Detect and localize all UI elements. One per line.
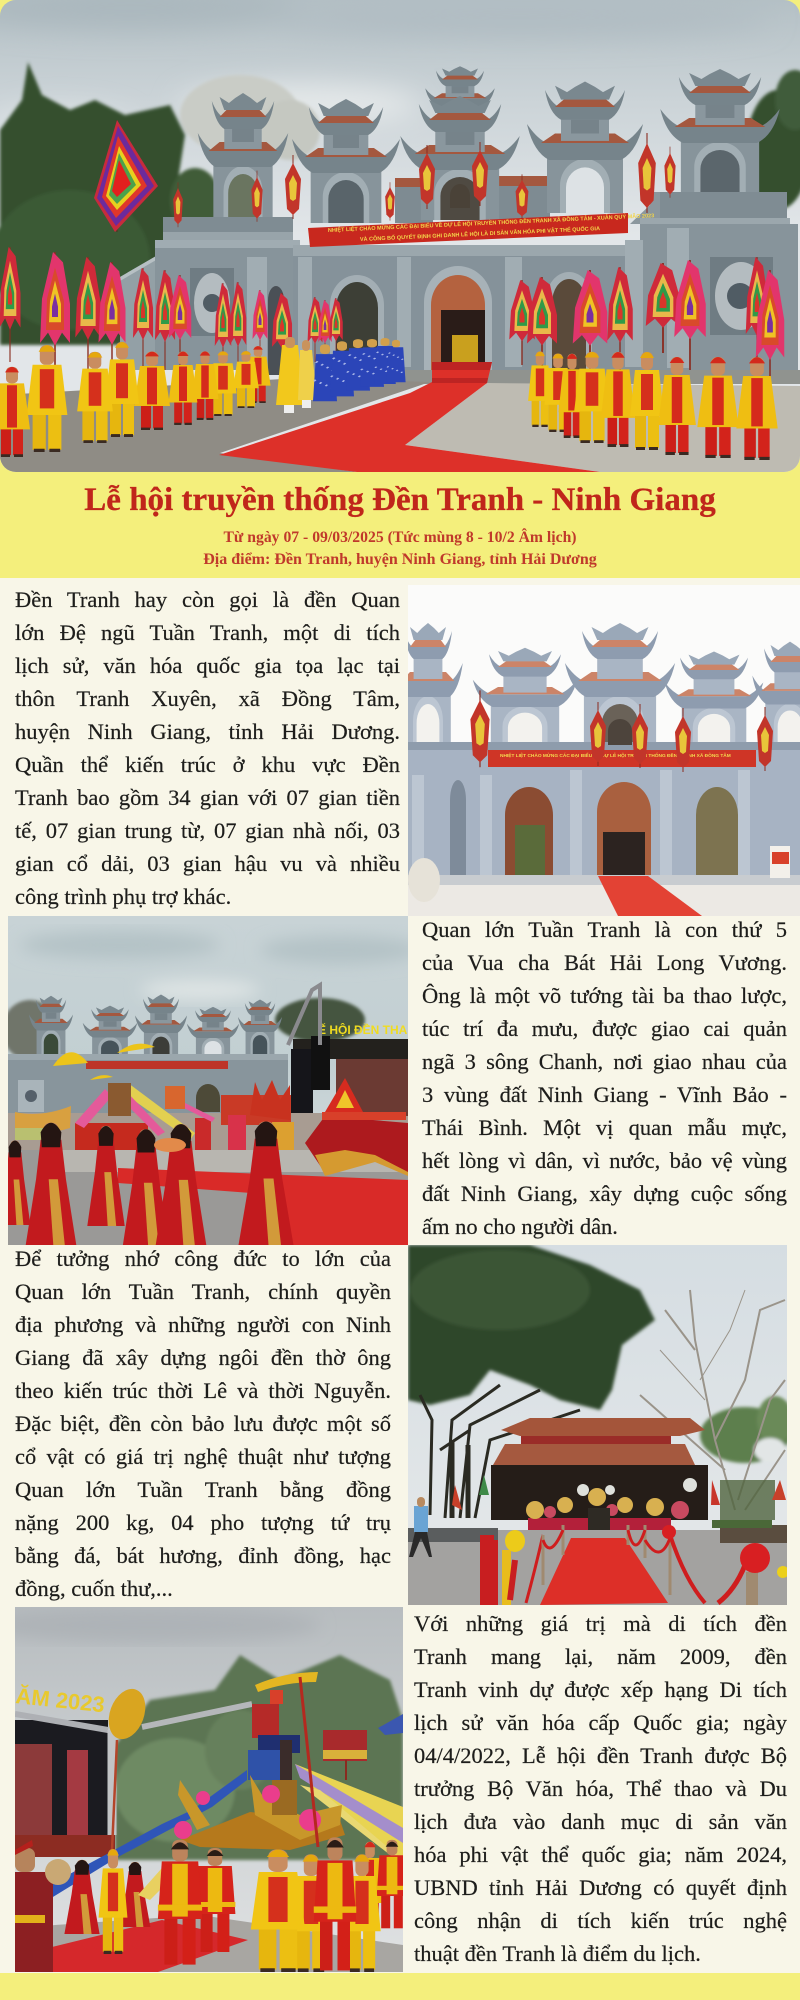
arches	[330, 275, 384, 354]
photo: festival procession at Đền Tranh gate	[0, 0, 800, 472]
text block: Quan lớn Tuần Tranh: Thái Bình. Một vị quan mẫu mực,	[422, 1115, 787, 1140]
crowd	[75, 1080, 294, 1183]
text block: Quan lớn Tuần Tranh: 3 vùng đất Ninh Giang - Vĩnh Bảo -	[422, 1082, 787, 1107]
carved panels and pillars	[247, 228, 689, 368]
banner: NHIỆT LIỆT CHÀO MỪNG CÁC ĐẠI BIỂU VỀ DỰ LỄ HỘI TRUYỀN THỐNG ĐỀN TRANH XÃ ĐỒNG TÂM - XUÂN QUÝ MÃO 2023	[328, 211, 654, 234]
text block: Quan lớn Tuần Tranh: túc trí đa mưu, được giao cai quản	[422, 1016, 787, 1041]
event stage	[288, 985, 437, 1116]
dancers in red	[0, 1122, 293, 1245]
upper flags	[285, 155, 301, 219]
text block: recognition: Tranh vinh dự được xếp hạng Di tích	[414, 1677, 787, 1702]
drapes	[40, 1764, 403, 1900]
photo: temple gate front view: NHIỆT LIỆT CHÀO MỪNG CÁC ĐẠI BIỂU VỀ DỰ LỄ HỘI TRUYỀN THỐNG ĐỀN TRANH XÃ ĐỒNG TÂM	[500, 751, 731, 759]
text block: recognition	[414, 1611, 787, 1966]
gate wall	[120, 256, 155, 370]
title: Lễ hội truyền thống Đền Tranh - Ninh Giang	[84, 482, 716, 518]
corner umbrella	[378, 1714, 403, 1735]
text block: recognition: Tranh mang lại, năm 2009, đền	[414, 1644, 787, 1669]
flags by the trees	[452, 1475, 786, 1510]
stage	[14, 1683, 252, 1857]
paved courtyard	[408, 1530, 787, 1605]
text block: temple construction: đồng, cuốn thư,...	[15, 1576, 173, 1601]
parasol and statue	[248, 1672, 318, 1780]
text block: Quan lớn Tuần Tranh: hết lòng vì dân, vì nước, bảo vệ vùng	[422, 1148, 787, 1173]
photo: temple gate front view	[408, 585, 800, 916]
temple hall	[491, 1418, 775, 1537]
text block: recognition: công nhận di tích kiến trúc nghệ	[414, 1908, 787, 1933]
text block: recognition: hóa phi vật thể quốc gia; năm 2024,	[414, 1842, 787, 1867]
text block: recognition: trưởng Bộ Văn hóa, Thể thao và Du	[414, 1776, 787, 1801]
ground and carpet	[8, 1150, 408, 1245]
text block: introduction: tế, 07 gian trung từ, 07 gian nhà nối, 03	[15, 818, 400, 843]
right greenery	[700, 1396, 793, 1463]
text block: introduction	[15, 587, 400, 909]
right participants	[528, 352, 778, 460]
sign board	[323, 1730, 367, 1780]
banner: VÀ CÔNG BỐ QUYẾT ĐỊNH GHI DANH LỄ HỘI LÀ DI SẢN VĂN HÓA PHI VẬT THỂ QUỐC GIA	[360, 224, 600, 243]
photo: women in red áo dài parade	[8, 916, 408, 1245]
text block: recognition: lịch đưa vào danh mục di sản văn	[414, 1809, 787, 1834]
towers	[198, 93, 288, 217]
text block: temple construction: địa phương và những người con Ninh	[15, 1312, 391, 1337]
text block: Quan lớn Tuần Tranh: Quan lớn Tuần Tranh là con thứ 5	[422, 917, 787, 942]
officials in yellow robes	[276, 337, 317, 413]
ground	[290, 370, 800, 384]
text block: recognition: Với những giá trị mà di tích đền	[414, 1611, 787, 1636]
text block: introduction: công trình phụ trợ khác.	[15, 884, 231, 909]
text block: introduction: lịch sử, văn hóa quốc gia tọa lạc tại	[15, 653, 400, 678]
location line: Địa điểm: Đền Tranh, huyện Ninh Giang, tỉnh Hải Dương	[203, 551, 597, 568]
text block: Quan lớn Tuần Tranh: ấm no cho người dân.	[422, 1214, 618, 1239]
text block: recognition: 04/4/2022, Lễ hội đền Tranh được Bộ	[414, 1743, 787, 1768]
text block: Quan lớn Tuần Tranh	[422, 917, 787, 1239]
bare tree	[640, 1290, 785, 1510]
banner	[308, 211, 654, 247]
red drape with diamond	[305, 1078, 408, 1176]
text block: introduction: thôn Tranh Xuyên, xã Đồng Tâm,	[15, 686, 400, 711]
text block: temple construction: theo kiến trúc thời Lê và thời Nguyễn.	[15, 1378, 391, 1403]
text block: introduction: gian cổ dải, 03 gian hậu vu và nhiều	[15, 851, 400, 876]
photo: temple courtyard and altar	[408, 1245, 787, 1605]
parapets	[163, 217, 293, 232]
header background band	[0, 0, 800, 578]
trees	[0, 62, 800, 345]
text block: temple construction	[14, 1246, 391, 1601]
text block: recognition: lịch sử văn hóa cấp Quốc gia; ngày	[414, 1710, 787, 1735]
text block: temple construction: Quan lớn Tuần Tranh bằng đồng	[15, 1477, 391, 1502]
large flag	[94, 120, 158, 232]
text block: Quan lớn Tuần Tranh: đất Ninh Giang, xây dựng cuộc sống	[422, 1181, 787, 1206]
date line: Từ ngày 07 - 09/03/2025 (Tức mùng 8 - 10/2 Âm lịch)	[223, 529, 577, 546]
text block: temple construction: cổ vật có giá trị nghệ thuật như tượng	[15, 1444, 391, 1469]
text block: temple construction: Quan lớn Tuần Tranh, chính quyền	[15, 1279, 391, 1304]
right flags	[509, 257, 784, 377]
ribbons and stanchions	[480, 1525, 789, 1605]
bearers	[99, 1837, 407, 1972]
text block: introduction: Tranh bao gồm 34 gian với 07 gian tiền	[15, 785, 400, 810]
text block: recognition: thuật đền Tranh là điểm du lịch.	[414, 1941, 701, 1966]
photo: palanquin procession	[15, 1607, 403, 1972]
stage: ĂM 2023	[15, 1683, 106, 1717]
banyan tree canopy	[408, 1245, 655, 1410]
ground and carpet	[15, 1915, 403, 1972]
text block: introduction: Quần thể kiến trúc ở khu vực Đền	[15, 752, 400, 777]
round banner	[102, 1684, 152, 1850]
text block: Quan lớn Tuần Tranh: Ông là một võ tướng tài ba thao lược,	[422, 983, 787, 1008]
left participants	[0, 342, 271, 457]
drummer	[15, 1840, 71, 1973]
text block: introduction: lớn Đệ ngũ Tuần Tranh, một di tích	[15, 620, 400, 645]
palanquin	[174, 1677, 345, 1850]
text block: Quan lớn Tuần Tranh: ngã 3 sông Chanh, nơi giao nhau của	[422, 1049, 787, 1074]
text block: Quan lớn Tuần Tranh: của Vua cha Bát Hải Long Vương.	[422, 950, 787, 975]
blue-robed elders	[313, 338, 406, 401]
bystanders	[64, 1860, 165, 1934]
text block: temple construction: Đặc biệt, đền còn bảo lưu được một số	[15, 1411, 391, 1436]
visitor	[409, 1497, 432, 1557]
text block: introduction: Đền Tranh hay còn gọi là đền Quan	[15, 587, 400, 612]
palanquin and ribbons	[15, 1083, 215, 1140]
carpet	[540, 1538, 668, 1605]
text block: temple construction: nặng 200 kg, 04 pho tượng tứ trụ	[15, 1510, 391, 1535]
trees	[115, 1655, 403, 1860]
umbrellas	[53, 1044, 155, 1080]
left flags	[0, 247, 343, 382]
text block: temple construction: Giang đã xây dựng ngôi đền thờ ông	[15, 1345, 391, 1370]
red carpet	[219, 362, 600, 472]
text block: recognition: UBND tỉnh Hải Dương có quyết định	[414, 1875, 787, 1900]
text block: temple construction: Để tưởng nhớ công đức to lớn của	[15, 1246, 391, 1271]
footer band	[0, 1973, 800, 2000]
text block: temple construction: bằng đá, bát hương, đỉnh đồng, hạc	[15, 1543, 391, 1568]
banyan trunks	[420, 1385, 580, 1518]
bare tree behind gate	[180, 75, 296, 149]
text block: introduction: huyện Ninh Giang, tỉnh Hải Dương.	[15, 719, 400, 744]
